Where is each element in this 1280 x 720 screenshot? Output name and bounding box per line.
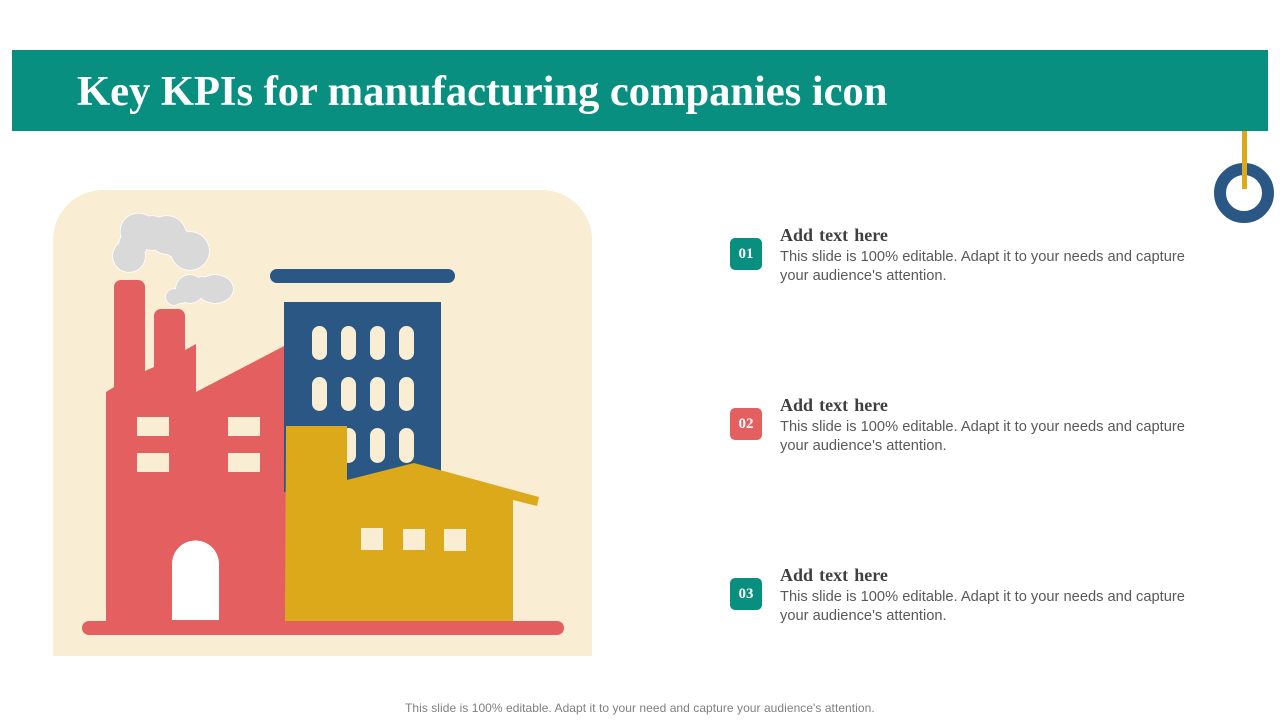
blue roof bar <box>270 269 455 283</box>
item 1 text: This slide is 100% editable. Adapt it to your needs and capture <box>780 249 1185 265</box>
item 2 text: your audience's attention. <box>780 438 947 454</box>
tower windows <box>312 326 414 463</box>
blue tower <box>284 302 441 492</box>
item 1 text <box>780 249 1185 284</box>
item 1 text: your audience's attention. <box>780 268 947 284</box>
large smoke cloud <box>113 214 209 272</box>
badge 03 <box>730 578 762 610</box>
badge 02 <box>730 408 762 440</box>
yellow building <box>285 426 539 622</box>
title banner <box>12 50 1268 131</box>
item 3 text: This slide is 100% editable. Adapt it to your needs and capture <box>780 589 1185 605</box>
item 3 text <box>780 589 1185 624</box>
yellow building windows <box>361 528 466 551</box>
chimneys and red factory <box>106 280 286 622</box>
illustration: factory <box>53 190 592 656</box>
item 2 text <box>780 419 1185 454</box>
icon: hanging ring <box>1214 131 1274 223</box>
item 2 heading: Add text here <box>780 395 888 415</box>
item 1 heading: Add text here <box>780 225 888 245</box>
item 2 <box>730 395 1185 454</box>
small smoke cloud <box>166 275 233 305</box>
item 3 <box>730 565 1185 624</box>
red factory windows <box>137 417 260 472</box>
illustration background panel <box>53 190 592 656</box>
badge 02: 02 <box>738 416 754 432</box>
ground bar <box>82 621 564 635</box>
factory door <box>172 540 219 620</box>
item 3 heading: Add text here <box>780 565 888 585</box>
badge 01: 01 <box>738 246 754 262</box>
footer note: This slide is 100% editable. Adapt it to your need and capture your audience's attention. <box>405 701 875 715</box>
item 2 text: This slide is 100% editable. Adapt it to your needs and capture <box>780 419 1185 435</box>
title: Key KPIs for manufacturing companies icon <box>77 68 887 115</box>
badge 03: 03 <box>738 586 754 602</box>
badge 01 <box>730 238 762 270</box>
item 3 text: your audience's attention. <box>780 608 947 624</box>
item 1 <box>730 225 1185 284</box>
